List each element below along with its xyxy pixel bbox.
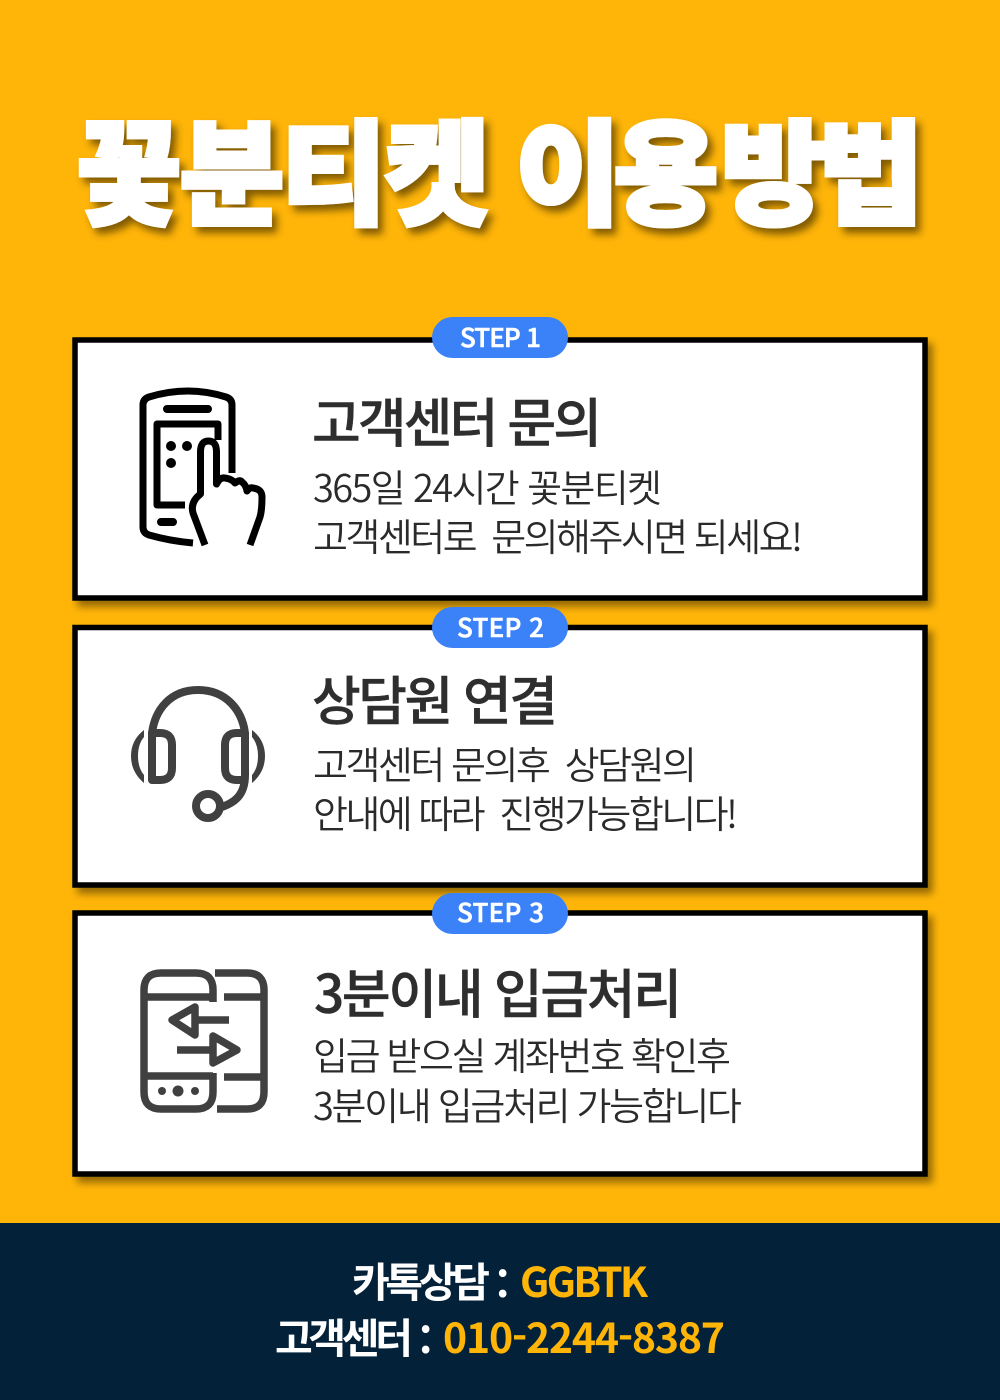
heading: step 3: 3분이내 입금처리 xyxy=(314,953,682,1029)
icon: phone transfer xyxy=(144,973,264,1109)
text: step 1 line 2: 고객센터로 문의해주시면 되세요! xyxy=(313,507,803,562)
footer: customer center phone: : xyxy=(419,1308,432,1368)
badge: STEP 3 xyxy=(432,893,568,934)
panel: step 1 xyxy=(75,317,925,598)
footer bar xyxy=(0,1223,1000,1400)
footer: kakao consultation xyxy=(352,1249,649,1312)
panel: step 3 xyxy=(75,893,925,1174)
panel: step 2 xyxy=(75,607,925,885)
footer: kakao consultation: GGBTK xyxy=(520,1249,649,1309)
badge: STEP 2: STEP 2 xyxy=(457,608,544,645)
panel box 3 xyxy=(75,913,925,1174)
footer: customer center phone: 고객센터 xyxy=(275,1305,413,1365)
text: step 2 line 1: 고객센터 문의후 상담원의 xyxy=(313,735,697,790)
badge: STEP 1 xyxy=(432,317,568,358)
badge: STEP 2 xyxy=(432,607,568,648)
footer: kakao consultation: : xyxy=(496,1252,509,1312)
icon: headset xyxy=(131,690,265,818)
text: step 2 line 2: 안내에 따라 진행가능합니다! xyxy=(313,784,738,839)
badge: STEP 1: STEP 1 xyxy=(460,318,541,355)
badge: STEP 3: STEP 3 xyxy=(457,893,544,930)
panel box 2 xyxy=(75,628,925,885)
heading: step 2: 상담원 연결 xyxy=(312,660,558,736)
text: step 3 line 2: 3분이내 입금처리 가능합니다 xyxy=(313,1076,742,1131)
heading: step 1: 고객센터 문의 xyxy=(312,382,602,458)
footer: customer center phone xyxy=(275,1305,725,1368)
title: 꽃분티켓 이용방법 xyxy=(77,84,923,248)
icon: phone touch xyxy=(143,391,262,545)
text: step 1 line 1: 365일 24시간 꽃분티켓 xyxy=(313,458,662,513)
panel box 1 xyxy=(75,340,925,598)
text: step 3 line 1: 입금 받으실 계좌번호 확인후 xyxy=(313,1026,731,1081)
footer: kakao consultation: 카톡상담 xyxy=(352,1249,490,1309)
footer: customer center phone: 010-2244-8387 xyxy=(443,1305,725,1365)
